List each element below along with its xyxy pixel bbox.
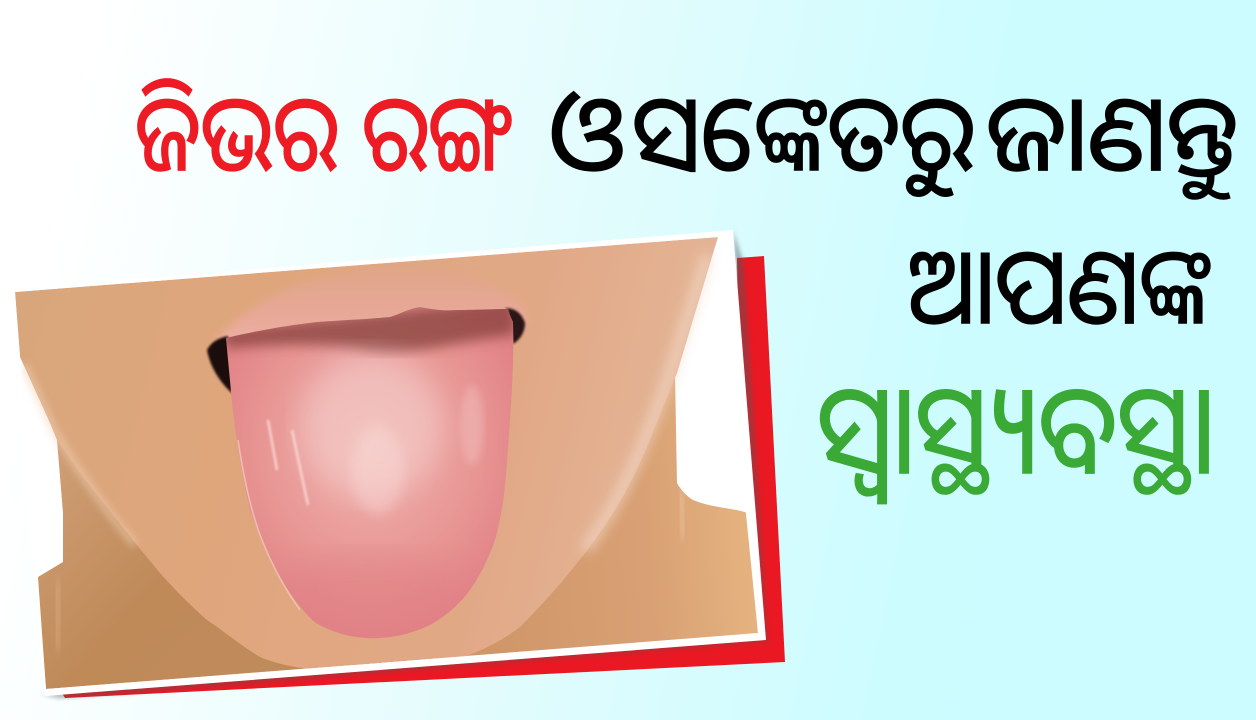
- tongue red edges: [334, 564, 406, 584]
- heading line 2: ଆପଣଙ୍କ: [908, 211, 1211, 355]
- tongue glossy highlight: [300, 353, 444, 497]
- heading line 1: ଜିଭର: [135, 58, 338, 202]
- heading line 1: ଜାଣନ୍ତୁ: [986, 58, 1238, 202]
- heading line 1: ସଙ୍କେତରୁ: [632, 58, 974, 202]
- neck highlight: [56, 580, 60, 650]
- heading line 1: ଓ: [549, 58, 626, 202]
- white card: [9, 230, 766, 696]
- card shadow: [42, 230, 768, 698]
- neck right: [350, 375, 758, 668]
- mouth corner right: [505, 308, 525, 344]
- title heading: [135, 58, 1238, 510]
- photo card: [9, 230, 785, 698]
- tongue pale rim: [238, 440, 300, 610]
- tongue: [226, 307, 513, 638]
- heading line 1: ରଙ୍ଗ: [362, 58, 512, 202]
- mouth corner left: [207, 336, 234, 395]
- heading line 1: [135, 58, 1238, 202]
- face rim light right: [585, 255, 708, 550]
- tongue back shadow: [222, 298, 515, 353]
- tongue details: [226, 307, 513, 584]
- face skin: [15, 237, 718, 673]
- photo of face and tongue: [15, 237, 758, 689]
- red backing panel: [60, 256, 785, 698]
- lips: [213, 271, 526, 341]
- neck left: [38, 440, 420, 689]
- face rim light left: [24, 365, 135, 545]
